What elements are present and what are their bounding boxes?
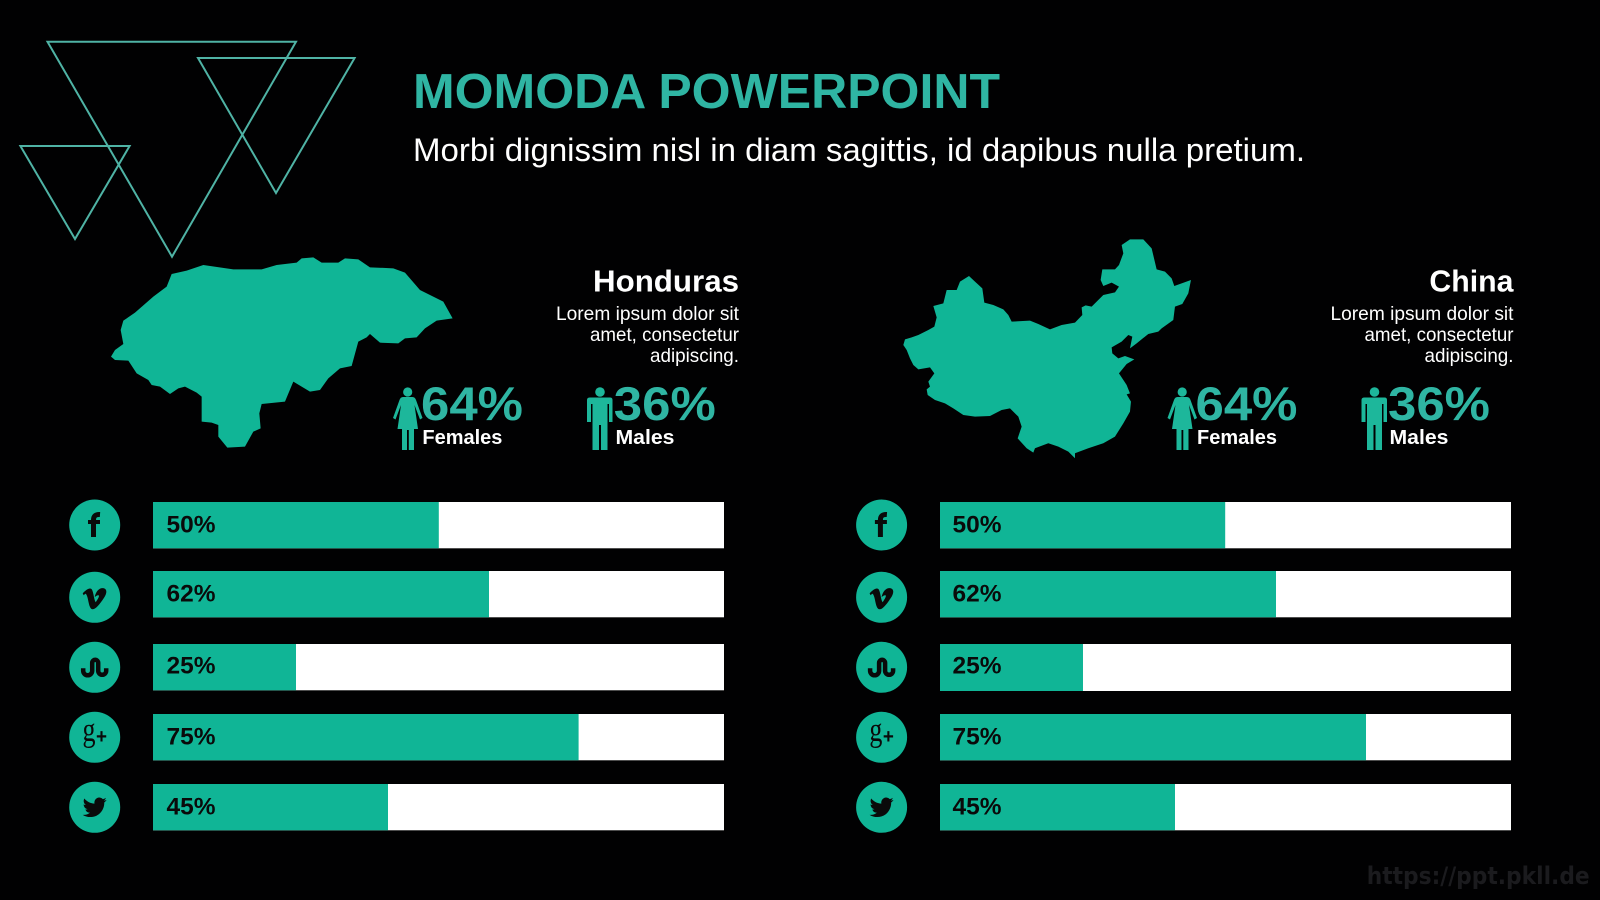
row: StumbleUpon 25%: [856, 642, 1511, 693]
row: Google Plus 75%: [69, 712, 724, 763]
stat: females: Females: [1197, 426, 1277, 449]
row: Vimeo 62%: 62%: [952, 581, 1002, 608]
stat: males: [614, 377, 716, 449]
heading: Honduras: Honduras: [593, 264, 739, 299]
subtitle: Morbi dignissim nisl in diam sagittis, id dapibus nulla pretium.: [413, 132, 1305, 168]
stat: males: Males: [1390, 426, 1448, 449]
row: Twitter 45%: [69, 782, 724, 833]
row: StumbleUpon 25%: [69, 642, 724, 693]
row: Vimeo 62%: 62%: [166, 581, 216, 608]
title: MOMODA POWERPOINT: [413, 65, 1000, 119]
stat: males: [1388, 377, 1490, 449]
row: Google Plus 75%: 75%: [952, 723, 1002, 750]
row: Google Plus 75%: 75%: [166, 723, 216, 750]
row: Twitter 45%: 45%: [166, 793, 216, 820]
panel: Honduras: [111, 257, 740, 450]
row: Google Plus 75%: g: [82, 712, 96, 749]
icon: male: [1362, 387, 1387, 450]
text block: China description: [1330, 303, 1514, 367]
stat: females: Females: [422, 426, 502, 449]
panel: China social bars: [856, 500, 1511, 833]
row: Facebook 50%: [69, 500, 724, 550]
icon: male: [587, 387, 612, 450]
row: Google Plus 75%: g: [869, 712, 882, 749]
panel: Honduras social bars: [69, 500, 724, 833]
text block: Honduras description: Lorem ipsum dolor sit: [556, 303, 740, 325]
stat: females: 64%: [1196, 377, 1298, 430]
map: China: [903, 239, 1191, 458]
map: Honduras: [111, 257, 453, 448]
text block: China description: Lorem ipsum dolor sit: [1330, 303, 1514, 325]
row: Facebook 50%: [856, 500, 1511, 550]
row: Google Plus 75%: +: [96, 726, 107, 748]
stat: females: [421, 377, 523, 449]
row: Facebook 50%: 50%: [166, 512, 216, 539]
stat: females: [1196, 377, 1298, 449]
icon: female: [393, 387, 422, 450]
stat: males: 36%: [614, 377, 716, 430]
text block: Honduras description: amet, consectetur: [590, 324, 739, 346]
decorative triangles: [20, 42, 355, 257]
text block: China description: amet, consectetur: [1364, 324, 1514, 346]
row: Twitter 45%: 45%: [952, 793, 1002, 820]
row: Facebook 50%: 50%: [952, 512, 1002, 539]
row: StumbleUpon 25%: 25%: [952, 652, 1002, 679]
stat: males: 36%: [1388, 377, 1490, 430]
text block: China description: adipiscing.: [1424, 345, 1514, 367]
text block: Honduras description: adipiscing.: [650, 345, 739, 367]
row: Google Plus 75%: [856, 712, 1511, 763]
row: Vimeo 62%: [69, 571, 724, 623]
stat: females: 64%: [421, 377, 523, 430]
heading: China: China: [1429, 264, 1514, 299]
row: Google Plus 75%: +: [883, 726, 894, 748]
stat: males: Males: [616, 426, 674, 449]
row: StumbleUpon 25%: 25%: [166, 652, 216, 679]
icon: female: [1168, 387, 1197, 450]
row: Twitter 45%: [856, 782, 1511, 833]
row: Vimeo 62%: [856, 571, 1511, 623]
panel: China: [903, 239, 1514, 458]
text block: Honduras description: [556, 303, 740, 367]
